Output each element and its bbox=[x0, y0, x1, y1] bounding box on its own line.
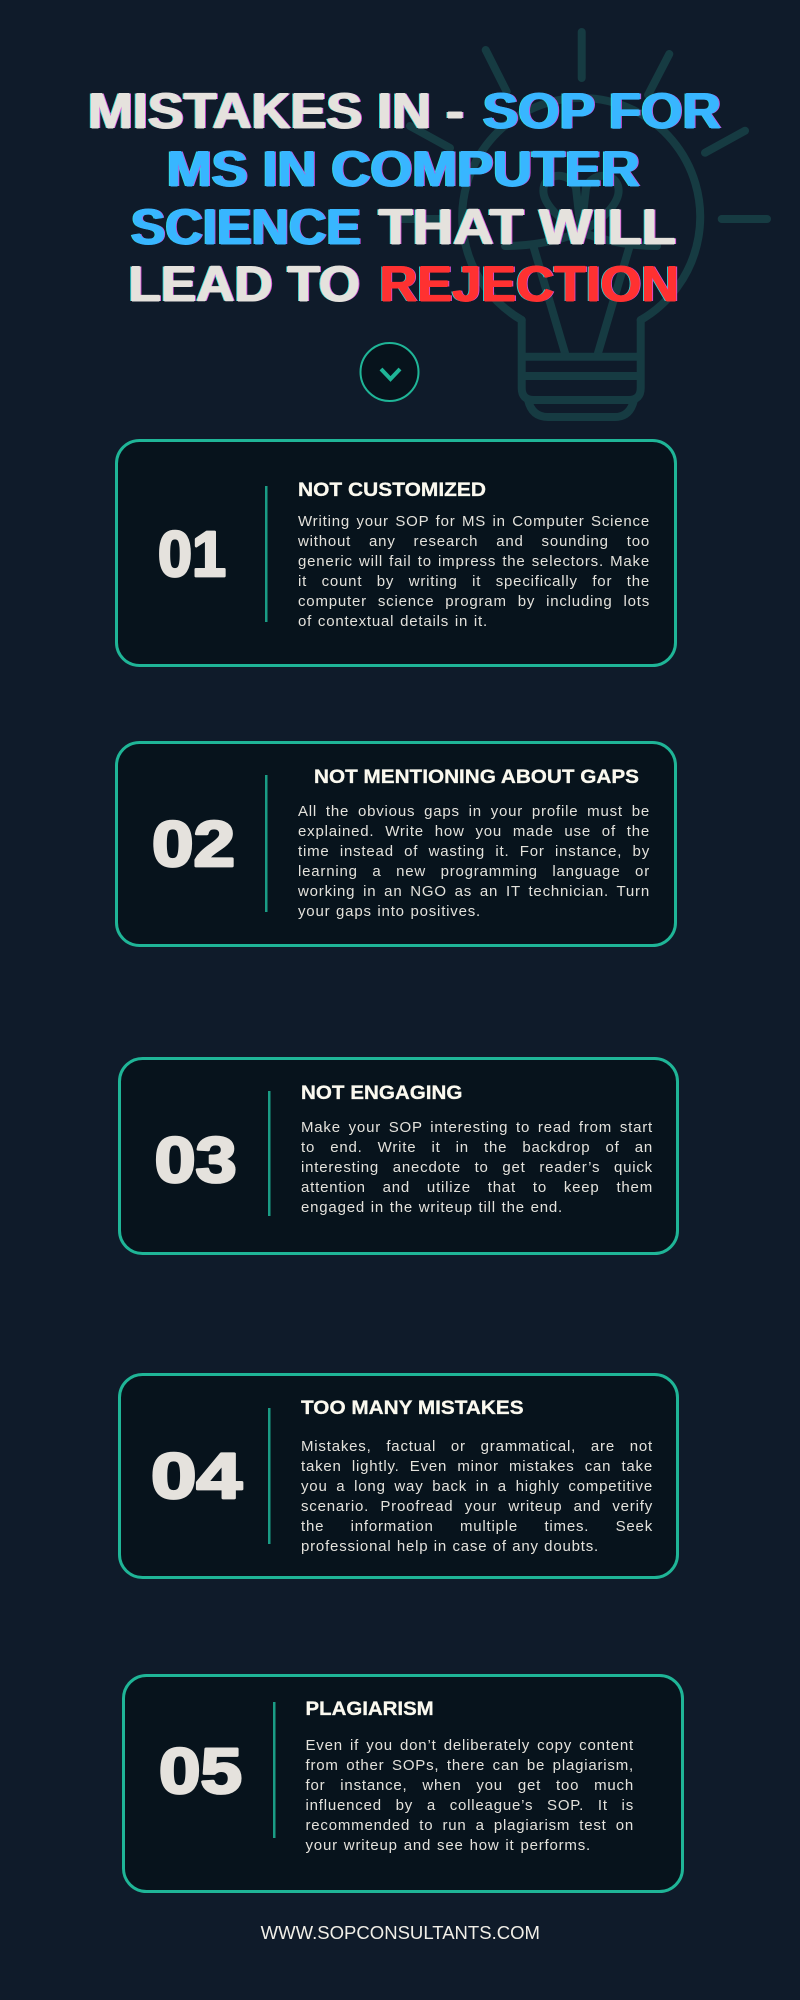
illustration: light bulb background bbox=[402, 28, 771, 421]
heading: TOO MANY MISTAKES bbox=[301, 1397, 524, 1419]
text block bbox=[301, 1119, 653, 1216]
text block bbox=[298, 513, 650, 630]
panel: 03 not engaging bbox=[118, 1057, 679, 1255]
text block: you a long way back in a highly competitive bbox=[301, 1478, 653, 1495]
text block: without any research and sounding too bbox=[298, 533, 650, 550]
title bbox=[88, 83, 722, 312]
text block: it count by writing it specifically for the bbox=[298, 573, 650, 590]
text block: engaged in the writeup till the end. bbox=[301, 1199, 563, 1216]
number 03: 03 bbox=[155, 1124, 237, 1196]
title: LEAD TO bbox=[128, 256, 360, 312]
text block: explained. Write how you made use of the bbox=[298, 823, 650, 840]
text block: from other SOPs, there can be plagiarism, bbox=[306, 1757, 634, 1774]
title: REJECTION bbox=[380, 256, 679, 312]
number 04: 04 bbox=[151, 1440, 243, 1512]
number 05: 05 bbox=[159, 1735, 242, 1807]
text block: the information multiple times. Seek bbox=[301, 1518, 653, 1535]
text block: for instance, when you get too much bbox=[306, 1777, 634, 1794]
text block: Even if you don’t deliberately copy content bbox=[306, 1737, 634, 1754]
text block: generic will fail to impress the selectors. Make bbox=[298, 553, 650, 570]
text block: All the obvious gaps in your profile must be bbox=[298, 803, 650, 820]
title: MS IN COMPUTER bbox=[167, 141, 640, 197]
text block: Writing your SOP for MS in Computer Science bbox=[298, 513, 650, 530]
footer: website: WWW.SOPCONSULTANTS.COM bbox=[261, 1922, 540, 1943]
text block: taken lightly. Even minor mistakes can take bbox=[301, 1458, 653, 1475]
text block: your writeup and see how it performs. bbox=[306, 1837, 591, 1854]
heading: PLAGIARISM bbox=[306, 1698, 434, 1720]
title: THAT WILL bbox=[378, 199, 676, 255]
text block: Make your SOP interesting to read from start bbox=[301, 1119, 653, 1136]
bulb filament bbox=[505, 176, 657, 353]
text block: to end. Write it in the backdrop of an bbox=[301, 1139, 653, 1156]
text block: attention and utilize that to keep them bbox=[301, 1179, 653, 1196]
title: SOP FOR bbox=[483, 83, 721, 139]
panel: 04 too many mistakes bbox=[118, 1373, 679, 1579]
bulb screw base bbox=[522, 320, 641, 417]
text block: scenario. Proofread your writeup and verify bbox=[301, 1498, 653, 1515]
bulb glass bbox=[462, 98, 700, 320]
text block: your gaps into positives. bbox=[298, 903, 481, 920]
heading: NOT MENTIONING ABOUT GAPS bbox=[314, 766, 639, 788]
bulb rays bbox=[396, 32, 767, 219]
panel: 01 not customized bbox=[115, 439, 677, 667]
text block: professional help in case of any doubts. bbox=[301, 1538, 599, 1555]
text block bbox=[306, 1737, 634, 1854]
number 01: 01 bbox=[158, 518, 226, 590]
text block: working in an NGO as an IT technician. Turn bbox=[298, 883, 650, 900]
heading: NOT ENGAGING bbox=[301, 1082, 462, 1104]
panel: 05 plagiarism bbox=[122, 1674, 684, 1893]
text block: computer science program by including lots bbox=[298, 593, 650, 610]
text block: influenced by a colleague’s SOP. It is bbox=[306, 1797, 634, 1814]
text block: learning a new programming language or bbox=[298, 863, 650, 880]
text block: time instead of wasting it. For instance, by bbox=[298, 843, 650, 860]
heading: NOT CUSTOMIZED bbox=[298, 479, 486, 501]
title: MISTAKES IN - bbox=[88, 83, 464, 139]
text block bbox=[298, 803, 650, 920]
text block: of contextual details in it. bbox=[298, 613, 488, 630]
text block: Mistakes, factual or grammatical, are not bbox=[301, 1438, 653, 1455]
title: SCIENCE bbox=[131, 199, 361, 255]
icon: chevron down in circle bbox=[360, 342, 420, 402]
text block: recommended to run a plagiarism test on bbox=[306, 1817, 634, 1834]
number 02: 02 bbox=[152, 808, 235, 880]
text block bbox=[301, 1438, 653, 1555]
text block: interesting anecdote to get reader’s quick bbox=[301, 1159, 653, 1176]
panel: 02 not mentioning about gaps bbox=[115, 741, 677, 947]
